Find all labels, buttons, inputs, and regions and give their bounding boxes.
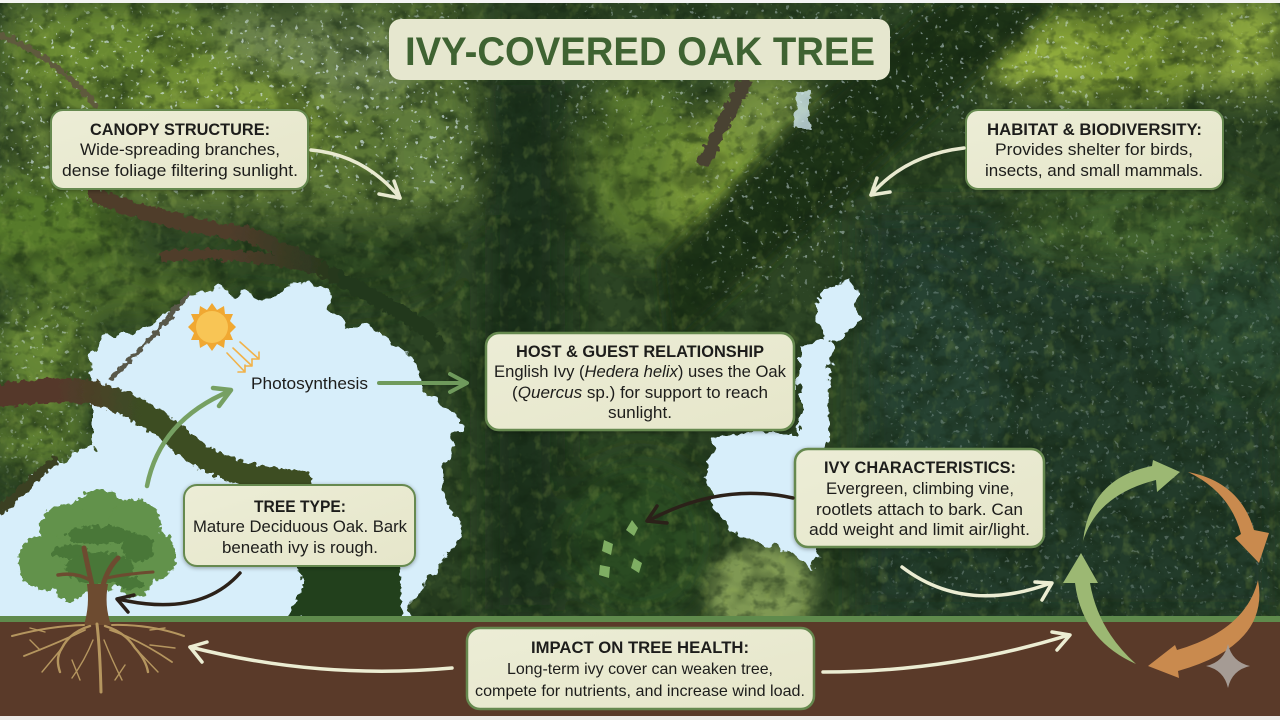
icon: sun with rays: [188, 303, 259, 372]
callout: impact on tree health: IMPACT ON TREE HEALTH:: [531, 638, 749, 657]
ivy vine leaves: [599, 520, 642, 578]
callout: tree type: Mature Deciduous Oak. Bark: [193, 517, 407, 536]
callout: canopy structure: [51, 110, 308, 189]
callout: host and guest relationship: HOST & GUEST RELATIONSHIP: [516, 342, 764, 361]
right sky: [708, 340, 830, 570]
arrow: impact callout to cycle: [823, 632, 1070, 672]
callout: tree type: TREE TYPE:: [254, 497, 346, 516]
ivy trunk base: [287, 560, 402, 618]
tree crown: [18, 490, 176, 601]
arrow: ivy callout to cycle: [902, 567, 1052, 600]
callout: habitat and biodiversity: Provides shelter for birds,: [995, 140, 1193, 159]
arrow: impact callout to roots: [190, 642, 452, 671]
title: [389, 19, 890, 80]
arrow: tree to photosynthesis: [147, 388, 231, 486]
cycle arrow: orange bottom: [1148, 580, 1259, 678]
callout: host and guest relationship: [486, 333, 794, 430]
callout: host and guest relationship: sunlight.: [608, 403, 672, 422]
callout: impact on tree health: [467, 628, 814, 709]
title: IVY-COVERED OAK TREE: [405, 30, 875, 74]
arrow: habitat callout to tree: [871, 148, 964, 195]
callout: impact on tree health: Long-term ivy cover can weaken tree,: [507, 661, 773, 678]
callout: habitat and biodiversity: HABITAT & BIODIVERSITY:: [987, 120, 1202, 139]
callout: tree type: [184, 485, 415, 566]
callout: ivy characteristics: [795, 449, 1044, 547]
callout: canopy structure: CANOPY STRUCTURE:: [90, 120, 270, 139]
branches: [0, 35, 95, 105]
label: photosynthesis: Photosynthesis: [251, 374, 368, 393]
callout: host and guest relationship: (Quercus sp.) for support to reach: [512, 383, 768, 402]
trunk: [84, 584, 111, 625]
left sky: [0, 283, 463, 640]
callout: habitat and biodiversity: [966, 110, 1223, 189]
callout: ivy characteristics: add weight and limit air/light.: [809, 520, 1030, 539]
icon: nutrient cycle arrows: [1063, 460, 1269, 678]
arrow: canopy callout to canopy: [311, 150, 400, 198]
roots: [12, 624, 184, 692]
arrow: tree type callout to tree: [117, 573, 240, 612]
callout: ivy characteristics: Evergreen, climbing vine,: [826, 479, 1014, 498]
callout: tree type: beneath ivy is rough.: [222, 538, 378, 557]
callout: host and guest relationship: English Ivy (Hedera helix) uses the Oak: [494, 362, 786, 381]
callout: habitat and biodiversity: insects, and small mammals.: [985, 161, 1203, 180]
cycle arrow: green top: [1083, 460, 1180, 541]
icon: oak tree with roots: [12, 490, 184, 692]
arrow: ivy callout to ivy vine: [647, 493, 793, 523]
cycle arrow: orange right: [1188, 472, 1269, 563]
callout: canopy structure: dense foliage filtering sunlight.: [62, 161, 298, 180]
icon: four-point sparkle: [1206, 644, 1250, 688]
arrow: photosynthesis to host callout: [379, 374, 467, 392]
cycle arrow: green bottom: [1063, 553, 1136, 664]
callout: canopy structure: Wide-spreading branches,: [80, 140, 280, 159]
callout: ivy characteristics: IVY CHARACTERISTICS:: [824, 458, 1016, 477]
callout: ivy characteristics: rootlets attach to bark. Can: [816, 500, 1023, 519]
callout: impact on tree health: compete for nutrients, and increase wind load.: [475, 683, 805, 700]
